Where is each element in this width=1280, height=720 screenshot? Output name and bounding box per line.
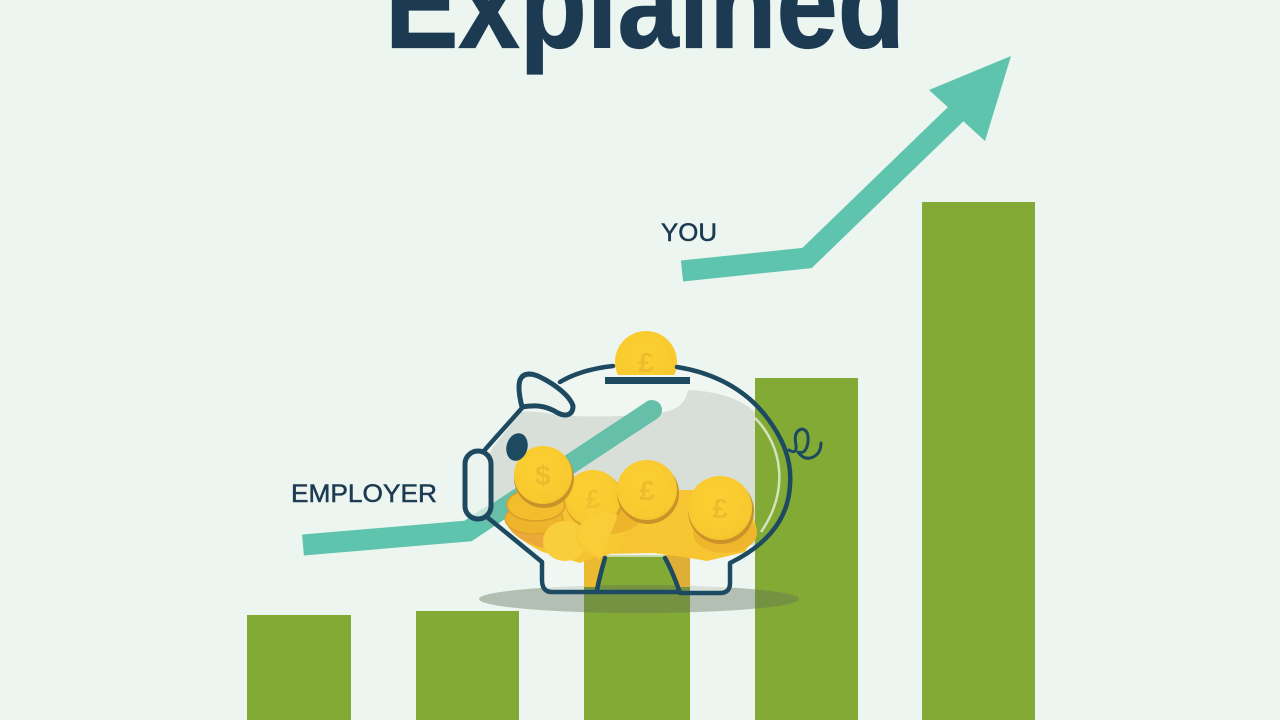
eye	[503, 431, 531, 463]
glass tint	[488, 390, 755, 545]
arrow: you trend line	[682, 56, 1011, 271]
arrow: employer trend line lower segment	[303, 513, 495, 545]
coin pile: £	[586, 484, 601, 514]
snout	[465, 451, 491, 519]
coin pile: $	[535, 460, 551, 491]
coin slot	[605, 377, 690, 384]
coin pile: £	[712, 493, 728, 524]
dropping coin: £	[638, 347, 654, 378]
dropping coin	[615, 331, 677, 375]
coin pile	[505, 446, 757, 563]
ear	[519, 374, 573, 415]
tail	[789, 429, 821, 458]
label: employer: EMPLOYER	[291, 480, 437, 508]
ground shadow	[479, 585, 799, 613]
piggy bank	[465, 331, 821, 593]
trend line seen through glass	[490, 410, 652, 517]
coin glow beside legs	[584, 555, 690, 587]
pig outline	[483, 366, 790, 593]
glass body	[483, 365, 755, 593]
label: you: YOU	[661, 219, 717, 247]
glass highlight	[755, 418, 779, 532]
coin pile: £	[639, 475, 655, 506]
bar chart	[247, 202, 1035, 720]
